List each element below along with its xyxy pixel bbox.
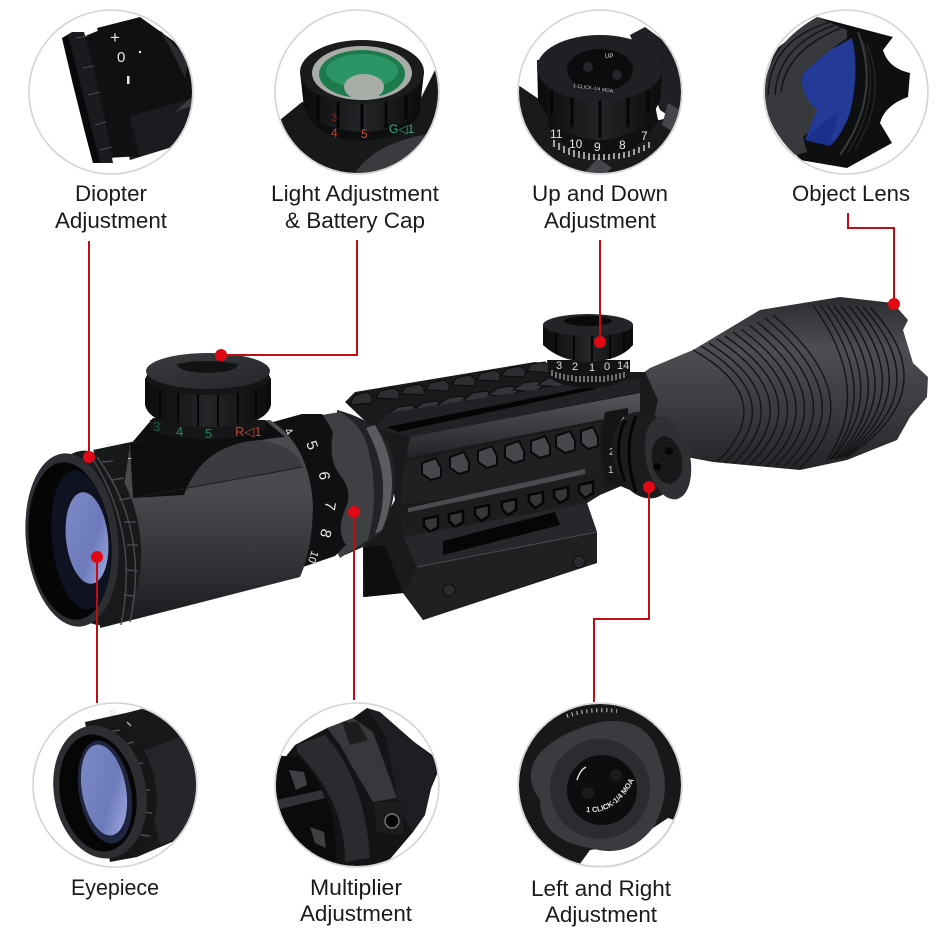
- collar: [337, 410, 395, 555]
- labels: Object Lens: [792, 181, 910, 206]
- rifle scope: [17, 297, 928, 632]
- rail body and mount: [345, 362, 658, 620]
- top turret: 3: [556, 360, 562, 372]
- callout dots: [83, 298, 900, 563]
- magnification ring: 4: [282, 426, 295, 438]
- middle strip: [400, 422, 600, 505]
- side turret: 2: [609, 447, 615, 458]
- top turret: 14: [617, 360, 629, 372]
- circle: up and down adjustment: 7: [641, 129, 648, 143]
- circle: eyepiece: 0: [110, 708, 115, 718]
- side turret: [602, 405, 698, 505]
- circle: up and down adjustment: 9: [594, 140, 601, 154]
- labels: Multiplier: [310, 875, 402, 900]
- ocular body: [93, 418, 313, 628]
- labels: [55, 181, 910, 927]
- groove: [375, 380, 640, 437]
- circle: up and down adjustment: 11: [550, 127, 563, 141]
- magnification ring: 5: [302, 439, 321, 452]
- circle: up and down adjustment: UP: [605, 54, 613, 60]
- magnification ring: 7: [321, 500, 339, 511]
- circle: up and down adjustment: 10: [569, 137, 583, 151]
- magnification ring: [273, 414, 348, 567]
- grey lobed ring: [303, 412, 374, 558]
- circle: light adjustment: G◁1: [389, 122, 415, 136]
- circle: left and right: 1 CLICK-1/4 MOA: [586, 779, 634, 812]
- illumination turret: [145, 353, 271, 441]
- circle: light adjustment: 4: [331, 126, 338, 140]
- callout lines: [89, 213, 894, 703]
- objective bell: [636, 297, 928, 470]
- circle: up and down adjustment: 1 CLICK-1/4 MOA: [573, 83, 614, 95]
- middle teeth: [422, 427, 598, 480]
- magnification ring: 8: [316, 527, 335, 539]
- illumination turret: R◁1: [235, 424, 262, 439]
- circle: light adjustment: [280, 40, 438, 173]
- circle: up and down adjustment: 8: [619, 138, 626, 152]
- top turret: [543, 314, 633, 388]
- rail strip: [408, 469, 585, 514]
- circle: diopter: [62, 17, 192, 163]
- labels: Adjustment: [300, 901, 412, 926]
- side turret: 4: [620, 416, 626, 427]
- illumination turret: 3: [153, 419, 160, 434]
- labels: Adjustment: [545, 902, 657, 927]
- eyepiece ring and lens: [17, 444, 152, 632]
- labels: & Battery Cap: [285, 208, 425, 233]
- circle: multiplier: [275, 703, 442, 869]
- ocular body: –: [124, 450, 132, 465]
- circle: light adjustment: 3: [331, 112, 337, 124]
- labels: Left and Right: [531, 876, 671, 901]
- circle: left and right: [519, 704, 681, 866]
- top turret: 2: [572, 361, 578, 373]
- top turret: 0: [604, 361, 610, 373]
- top rail teeth: [350, 362, 550, 405]
- side turret: 1: [608, 465, 614, 476]
- labels: Diopter: [75, 181, 147, 206]
- upper band: [406, 393, 640, 458]
- labels: Eyepiece: [71, 875, 159, 900]
- mount: [403, 503, 597, 567]
- illumination turret: 5: [205, 426, 212, 441]
- circle: eyepiece: [53, 708, 196, 862]
- side turret: 3: [615, 431, 621, 442]
- labels: Adjustment: [544, 208, 656, 233]
- top turret: 1: [589, 362, 595, 374]
- circle: diopter: +: [110, 28, 120, 47]
- labels: Light Adjustment: [271, 181, 439, 206]
- lower teeth: [424, 482, 593, 532]
- magnification ring: 10: [305, 549, 320, 565]
- circle: diopter: 0: [117, 49, 125, 66]
- ocular body: 0: [106, 443, 112, 454]
- labels: Up and Down: [532, 181, 668, 206]
- magnification ring: 6: [315, 471, 333, 481]
- circle: light adjustment: 5: [361, 127, 368, 141]
- labels: Adjustment: [55, 208, 167, 233]
- circle: up and down adjustment: [519, 27, 681, 173]
- illumination turret: 4: [176, 424, 183, 439]
- circle: object lens: [765, 17, 910, 168]
